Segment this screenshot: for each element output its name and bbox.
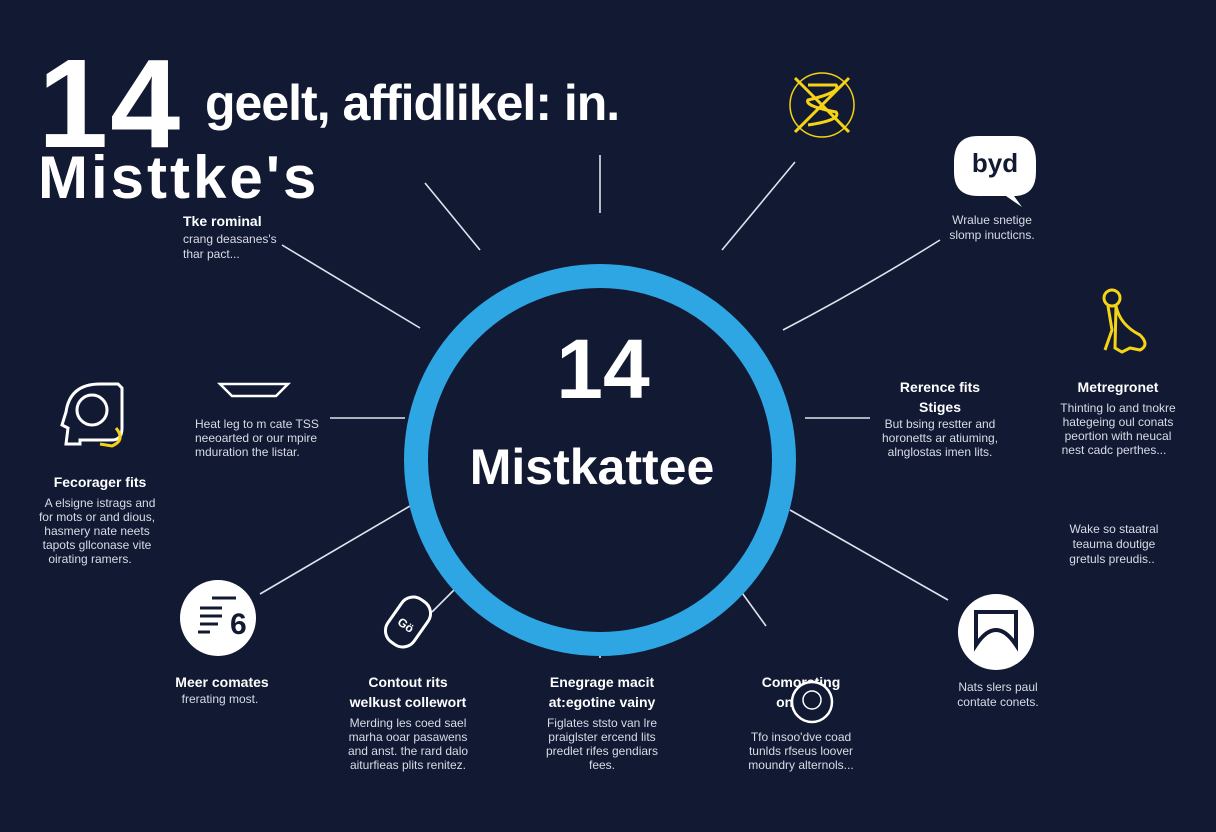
panel: bottom 1: Merding les coed sael — [350, 716, 466, 730]
panel: right-middle — [882, 379, 998, 459]
panel: bottom-left — [175, 674, 269, 706]
connector lines — [260, 155, 948, 658]
panel: bottom-left: Meer comates — [175, 674, 269, 690]
panel: left: hasmery nate neets — [44, 524, 150, 538]
panel: right: Thinting lo and tnokre — [1060, 401, 1176, 415]
central ring — [416, 276, 784, 644]
panel: right — [1060, 379, 1176, 457]
panel: bottom 2: praiglster ercend lits — [548, 730, 656, 744]
panel: bottom 3: oner es — [776, 694, 826, 710]
panel: bottom 2: Figlates ststo van lre — [547, 716, 657, 730]
icon: speech bubble — [954, 136, 1036, 207]
icon: yellow spring — [790, 73, 854, 137]
panel: bottom 2: at:egotine vainy — [549, 694, 655, 710]
panel: top-right text — [949, 213, 1035, 242]
title: Misttke's — [38, 144, 319, 211]
top-left text: Tke rominal — [183, 213, 262, 229]
panel: bottom 1: welkust collewort — [349, 694, 467, 710]
icon: document circle — [180, 580, 256, 656]
icon: face circle — [958, 594, 1034, 670]
left-middle text: neeoarted or our mpire — [195, 431, 317, 445]
top-left text — [183, 213, 277, 261]
panel: left — [39, 474, 155, 566]
icon: yellow key — [1104, 290, 1145, 352]
panel: right-middle: horonetts ar atiuming, — [882, 431, 998, 445]
icon: tray — [220, 384, 288, 396]
panel: right: peortion with neucal — [1065, 429, 1171, 443]
panel: bottom 1: Contout rits — [368, 674, 448, 690]
panel: right-lower text: gretuls preudis.. — [1069, 552, 1155, 566]
central ring: 14 — [556, 322, 650, 416]
central ring: Mistkattee — [470, 439, 714, 495]
panel: right-lower text — [1069, 522, 1158, 566]
panel: right-middle: Stiges — [919, 399, 961, 415]
icon: document circle: 6 — [230, 608, 247, 641]
panel: left: A elsigne istrags and — [45, 496, 155, 510]
panel: bottom 2 — [546, 674, 658, 772]
panel: right-middle: Rerence fits — [900, 379, 980, 395]
panel: right: Metregronet — [1078, 379, 1159, 395]
panel: bottom 1 — [348, 674, 468, 772]
panel: bottom-right — [957, 680, 1039, 709]
panel: right-lower text: teauma doutige — [1073, 537, 1156, 551]
panel: bottom-left: frerating most. — [182, 692, 258, 706]
icon: speech bubble: byd — [972, 148, 1018, 178]
panel: bottom 3: Tfo insoo'dve coad — [751, 730, 851, 744]
panel: right-middle: But bsing restter and — [885, 417, 995, 431]
title: 14 — [38, 33, 182, 174]
icon: tag: Gö — [395, 615, 417, 636]
panel: bottom 1: marha ooar pasawens — [349, 730, 467, 744]
panel: left: for mots or and dious, — [39, 510, 155, 524]
panel: bottom 2: fees. — [589, 758, 615, 772]
panel: bottom 2: predlet rifes gendiars — [546, 744, 658, 758]
panel: bottom 1: and anst. the rard dalo — [348, 744, 468, 758]
panel: left: tapots gllconase vite — [43, 538, 152, 552]
panel: top-right text: Wralue snetige — [952, 213, 1032, 227]
panel: bottom-right: Nats slers paul — [958, 680, 1038, 694]
panel: bottom 3: moundry alternols... — [748, 758, 854, 772]
icon: head clock — [62, 384, 122, 446]
title — [38, 33, 619, 211]
panel: top-right text: slomp inucticns. — [949, 228, 1035, 242]
panel: right: hategeing oul conats — [1063, 415, 1173, 429]
icon: tag — [380, 592, 436, 652]
panel: right-middle: alnglostas imen lits. — [888, 445, 992, 459]
top-left text: crang deasanes's — [183, 232, 277, 246]
panel: right: nest cadc perthes... — [1062, 443, 1166, 457]
panel: right-lower text: Wake so staatral — [1070, 522, 1158, 536]
panel: left: oirating ramers. — [48, 552, 132, 566]
panel: bottom 3: tunlds rfseus loover — [749, 744, 853, 758]
left-middle text: Heat leg to m cate TSS — [195, 417, 319, 431]
panel: bottom 3 — [748, 674, 854, 772]
left-middle text: mduration the listar. — [195, 445, 300, 459]
panel: bottom 2: Enegrage macit — [550, 674, 654, 690]
panel: left: Fecorager fits — [54, 474, 147, 490]
panel: bottom 3: Comorsting — [762, 674, 840, 690]
panel: bottom 1: aiturfieas plits renitez. — [350, 758, 466, 772]
top-left text: thar pact... — [183, 247, 240, 261]
left-middle text — [195, 417, 319, 459]
title: geelt, affidlikel: in. — [205, 75, 619, 131]
panel: bottom-right: contate conets. — [957, 695, 1039, 709]
